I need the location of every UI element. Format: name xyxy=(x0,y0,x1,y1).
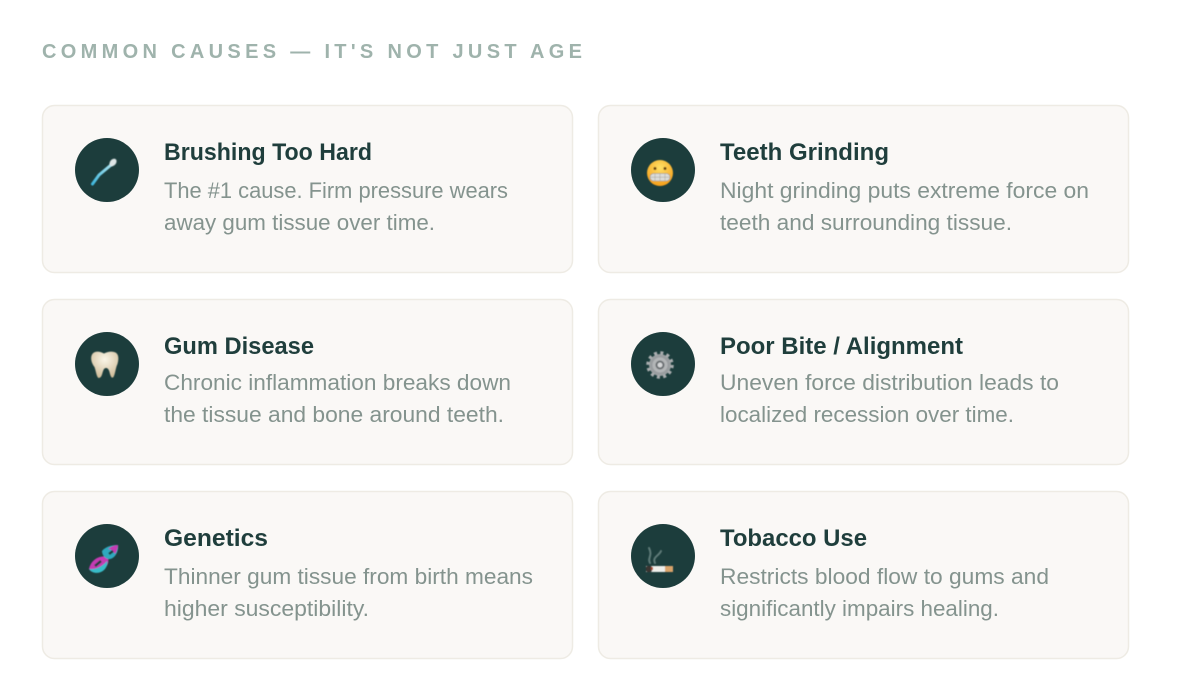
icon: toothbrush xyxy=(75,138,139,202)
text: genetics: Thinner gum tissue from birth means xyxy=(164,564,533,589)
text: teeth grinding: teeth and surrounding tissue. xyxy=(720,210,1012,235)
text: tobacco use: Tobacco Use xyxy=(720,525,867,552)
text: genetics xyxy=(164,525,533,621)
heading: COMMON CAUSES — IT'S NOT JUST AGE xyxy=(42,41,582,63)
text: brushing too hard xyxy=(164,139,508,235)
text: gum disease: the tissue and bone around teeth. xyxy=(164,402,504,427)
icon: dna xyxy=(75,524,139,588)
panel: brushing too hard xyxy=(42,106,572,272)
panel: tobacco use xyxy=(598,492,1128,658)
icon: gear xyxy=(631,332,695,396)
icon: tooth xyxy=(75,332,139,396)
text: poor bite / alignment: Poor Bite / Alignment xyxy=(720,333,963,360)
text: tobacco use xyxy=(720,525,1049,621)
text: brushing too hard: away gum tissue over time. xyxy=(164,210,435,235)
text: poor bite / alignment: Uneven force distribution leads to xyxy=(720,370,1059,395)
text: gum disease xyxy=(164,333,511,427)
text: teeth grinding xyxy=(720,139,1089,235)
text: gum disease: Gum Disease xyxy=(164,333,314,360)
text: brushing too hard: The #1 cause. Firm pressure wears xyxy=(164,178,508,203)
text: teeth grinding: Night grinding puts extreme force on xyxy=(720,178,1089,203)
text: teeth grinding: Teeth Grinding xyxy=(720,139,889,166)
text: genetics: higher susceptibility. xyxy=(164,596,369,621)
icon: grimacing face xyxy=(631,138,695,202)
text: poor bite / alignment xyxy=(720,333,1059,427)
text: gum disease: Chronic inflammation breaks down xyxy=(164,370,511,395)
panel: teeth grinding xyxy=(598,106,1128,272)
panel: genetics xyxy=(42,492,572,658)
text: tobacco use: significantly impairs healing. xyxy=(720,596,999,621)
panel: poor bite / alignment xyxy=(598,300,1128,464)
text: brushing too hard: Brushing Too Hard xyxy=(164,139,372,166)
text: genetics: Genetics xyxy=(164,525,268,552)
text: tobacco use: Restricts blood flow to gums and xyxy=(720,564,1049,589)
panel: gum disease xyxy=(42,300,572,464)
text: poor bite / alignment: localized recession over time. xyxy=(720,402,1014,427)
icon: cigarette xyxy=(631,524,695,588)
